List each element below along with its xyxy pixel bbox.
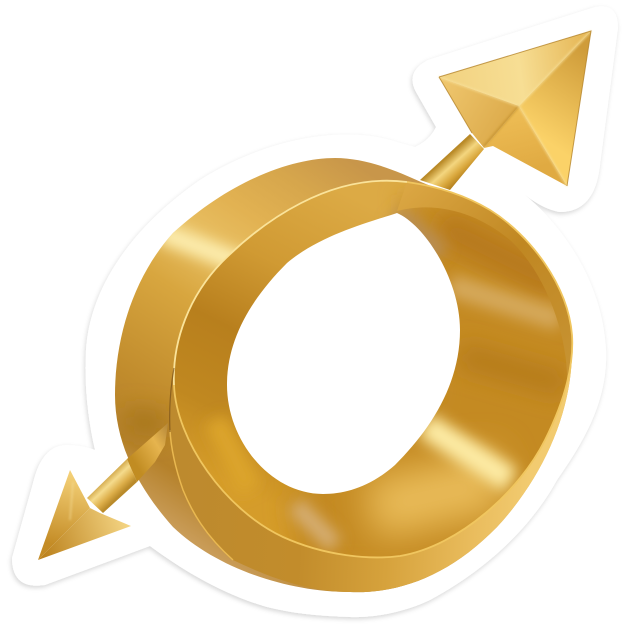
lower arrow shaft: [87, 459, 137, 513]
ring hole: [227, 213, 460, 494]
right lip: [397, 182, 572, 380]
outer band (back of ring): [115, 158, 572, 592]
front band face: [175, 182, 567, 556]
dark seam: [170, 368, 174, 432]
lower arrowhead: [38, 470, 131, 560]
arrowhead: [439, 31, 591, 186]
arrow cone reflected on band: [127, 423, 168, 482]
lower band of ring: [170, 366, 572, 592]
inner band shading: [215, 195, 590, 570]
rim highlight line: [174, 181, 407, 385]
second rim line on left side: [170, 430, 233, 560]
arrow shaft: [420, 134, 484, 190]
upper arrow: [420, 31, 591, 190]
ring: [115, 158, 574, 592]
